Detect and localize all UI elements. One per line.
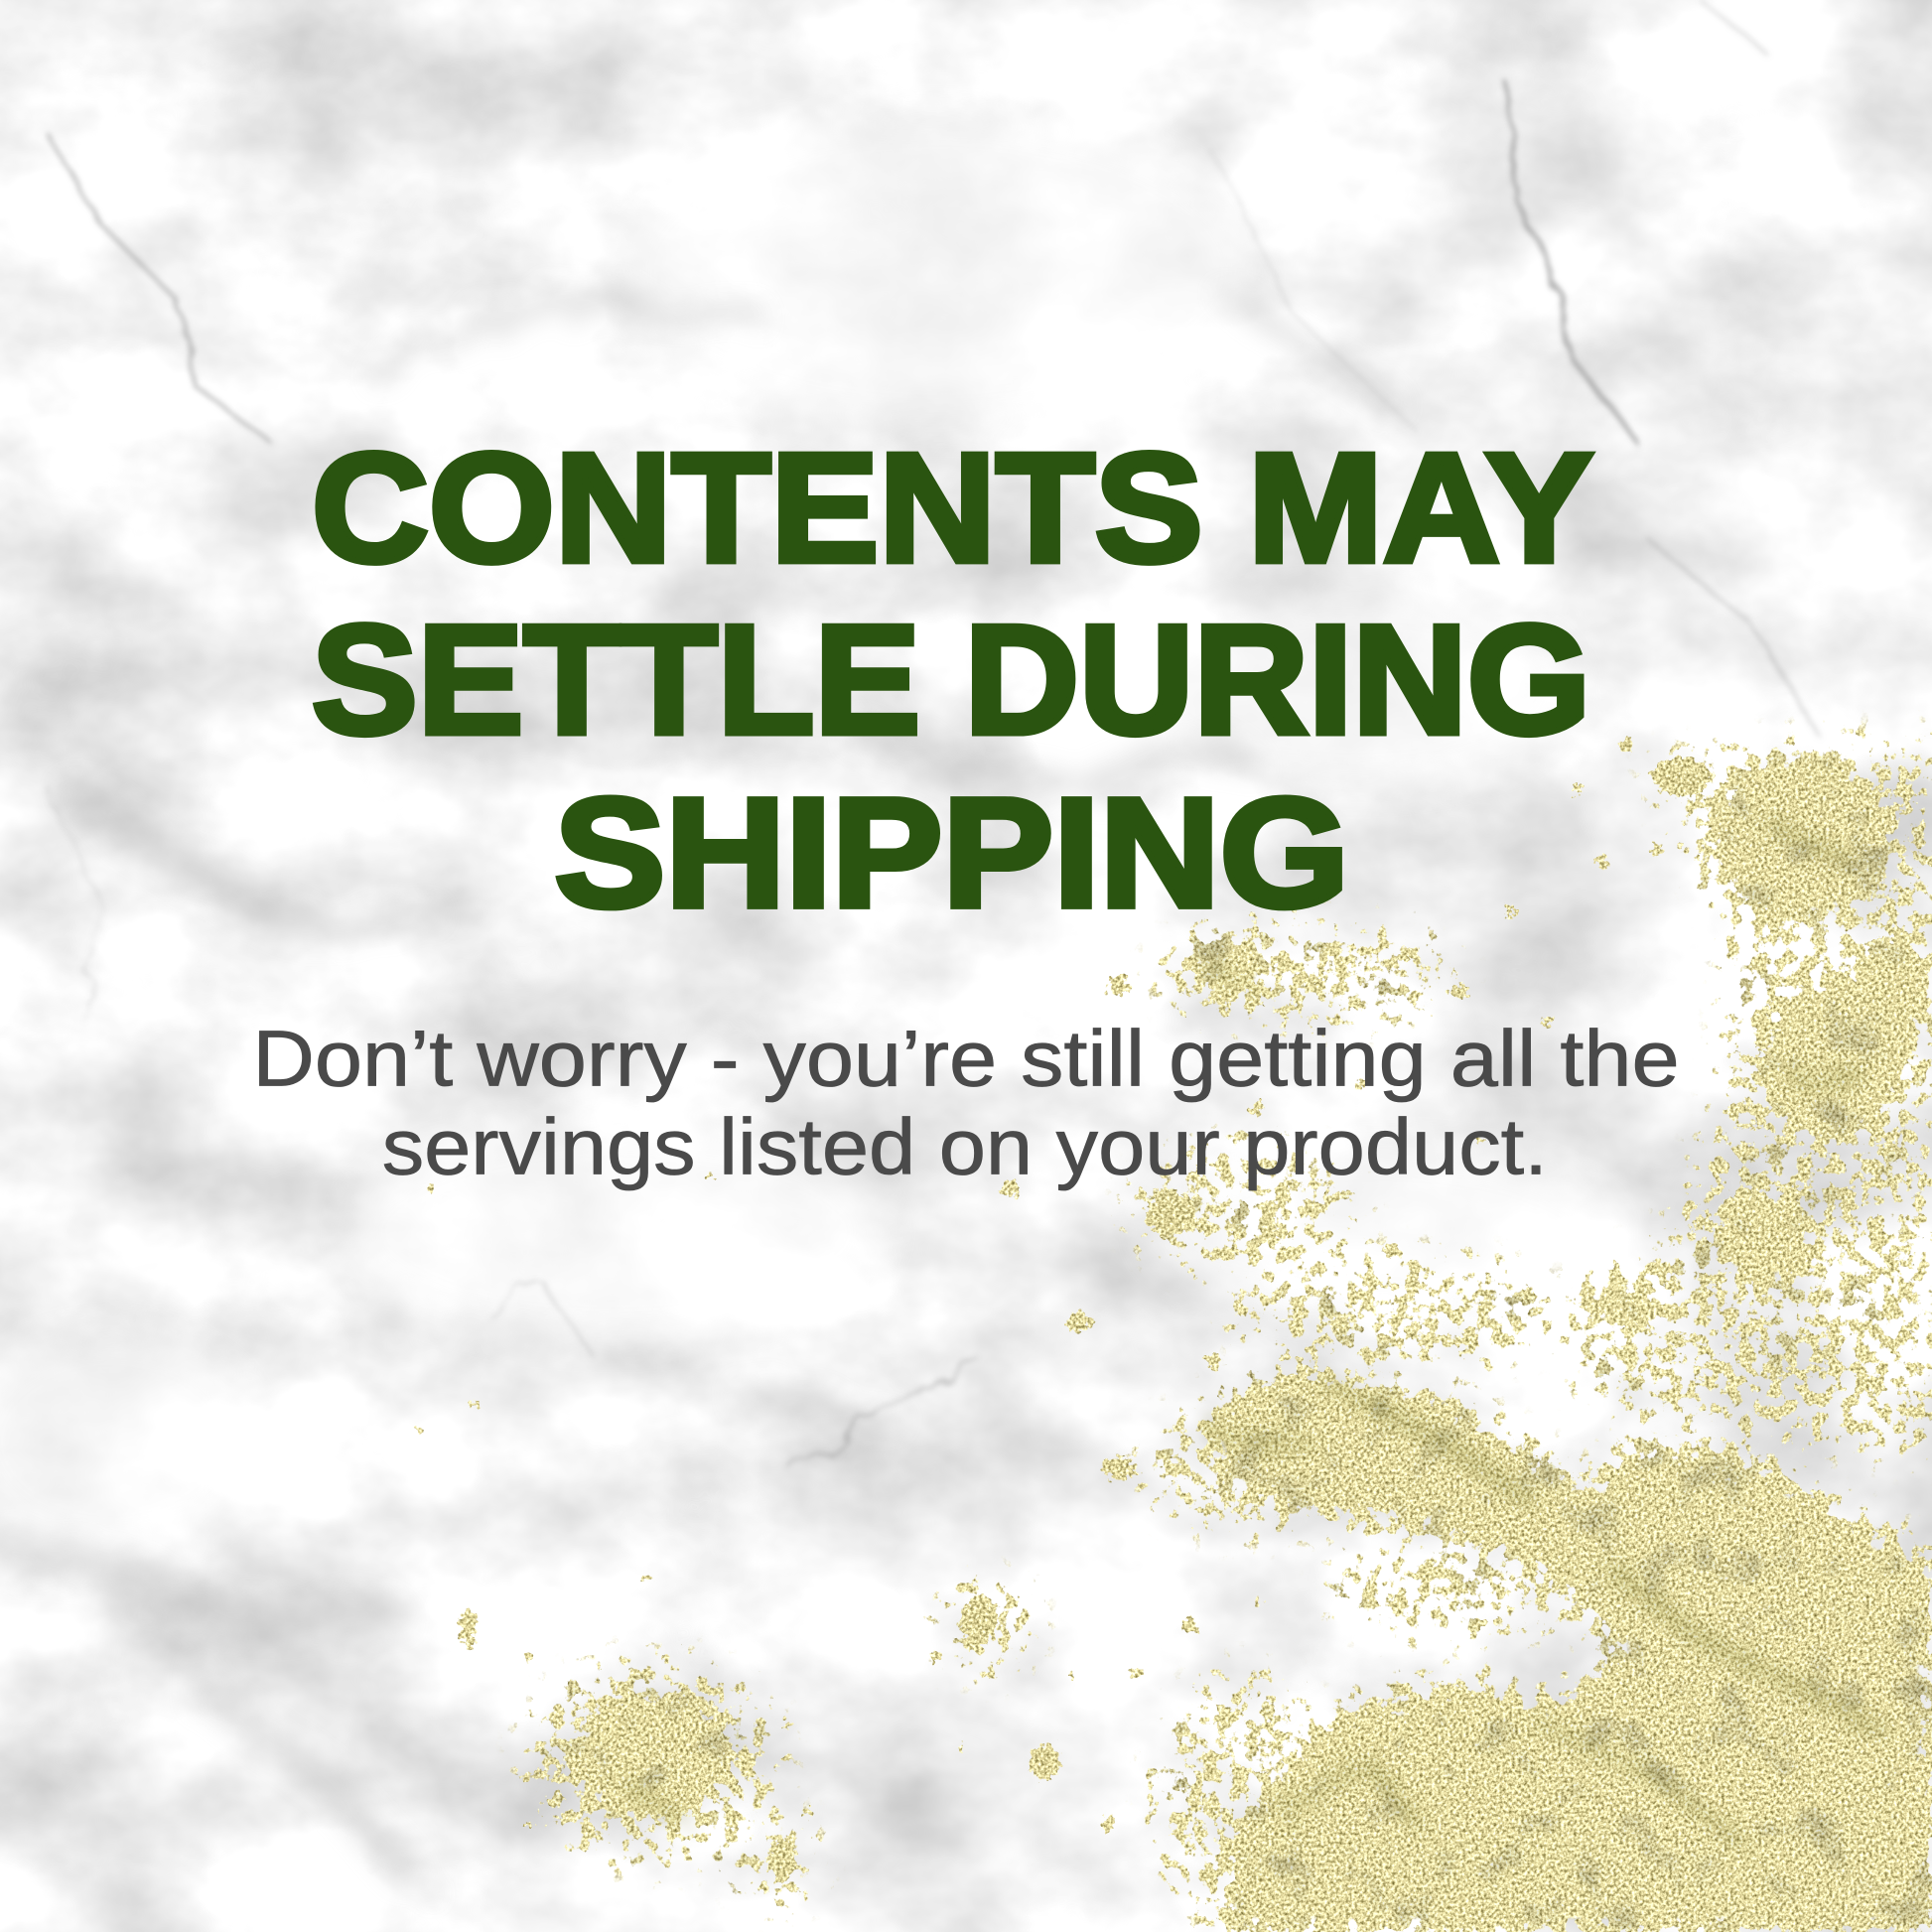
subheading text: Don’t worry - you’re still getting all the bbox=[252, 1014, 1680, 1102]
heading: SHIPPING bbox=[554, 766, 1349, 940]
powder: scattered loose grains bbox=[530, 740, 1932, 1922]
heading bbox=[312, 421, 1593, 940]
subheading text bbox=[252, 1014, 1680, 1191]
powder: shaded folds bbox=[628, 826, 1872, 1849]
powder: small grains and crumbs bbox=[415, 738, 1712, 1882]
heading: CONTENTS MAY bbox=[312, 421, 1593, 595]
powder: dense mounds bbox=[567, 752, 1932, 1932]
powder spill bbox=[415, 738, 1932, 1932]
heading: SETTLE DURING bbox=[312, 593, 1590, 766]
subheading text: servings listed on your product. bbox=[382, 1103, 1548, 1191]
